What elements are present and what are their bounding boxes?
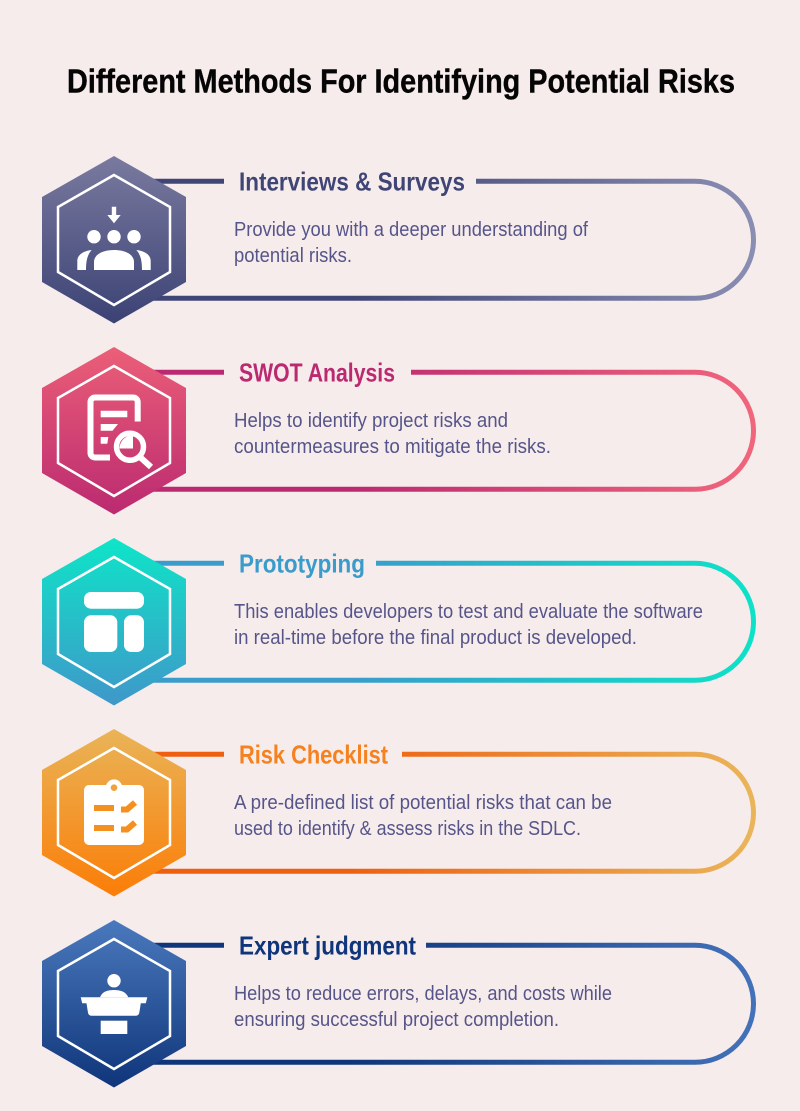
connector outline xyxy=(130,181,754,298)
description: Provide you with a deeper understanding of xyxy=(234,219,588,241)
description xyxy=(234,410,551,458)
description xyxy=(234,219,588,267)
connector outline xyxy=(130,372,754,489)
description xyxy=(234,983,612,1031)
heading: SWOT Analysis xyxy=(239,358,395,388)
description: countermeasures to mitigate the risks. xyxy=(234,436,551,458)
description: ensuring successful project completion. xyxy=(234,1009,559,1031)
heading: Interviews & Surveys xyxy=(239,166,465,196)
description: A pre-defined list of potential risks that can be xyxy=(234,792,612,814)
connector outline xyxy=(130,754,754,871)
inner hexagon outline xyxy=(58,748,170,878)
connector outline xyxy=(130,563,754,680)
description: in real-time before the final product is developed. xyxy=(234,627,637,649)
inner hexagon outline xyxy=(58,557,170,687)
panel: SWOT Analysis xyxy=(42,347,754,514)
connector outline xyxy=(130,945,754,1062)
hexagon badge xyxy=(42,538,186,706)
panel: Expert judgment xyxy=(42,920,754,1088)
icon: speaker at podium xyxy=(81,974,147,1034)
heading: Prototyping xyxy=(239,548,365,578)
description: used to identify & assess risks in the SDLC. xyxy=(234,818,581,840)
panel: Risk Checklist xyxy=(42,729,754,896)
icon: group of people with arrow xyxy=(77,207,151,270)
inner hexagon outline xyxy=(58,939,170,1069)
description xyxy=(234,601,703,649)
description: Helps to identify project risks and xyxy=(234,410,508,432)
heading: Risk Checklist xyxy=(239,740,388,770)
heading: Expert judgment xyxy=(239,930,416,960)
inner hexagon outline xyxy=(58,366,170,496)
hexagon badge xyxy=(42,729,186,896)
hexagon badge xyxy=(42,156,186,324)
panel: Prototyping xyxy=(42,538,754,706)
icon: document with magnifier xyxy=(90,398,151,467)
hexagon badge xyxy=(42,347,186,514)
hexagon badge xyxy=(42,920,186,1088)
inner hexagon outline xyxy=(58,175,170,305)
description: Helps to reduce errors, delays, and costs while xyxy=(234,983,612,1005)
description: potential risks. xyxy=(234,245,352,267)
description xyxy=(234,792,612,840)
panel: Interviews & Surveys xyxy=(42,156,754,324)
icon: layout blocks xyxy=(84,592,144,652)
description: This enables developers to test and evaluate the software xyxy=(234,601,703,623)
icon: clipboard checklist xyxy=(84,779,144,845)
